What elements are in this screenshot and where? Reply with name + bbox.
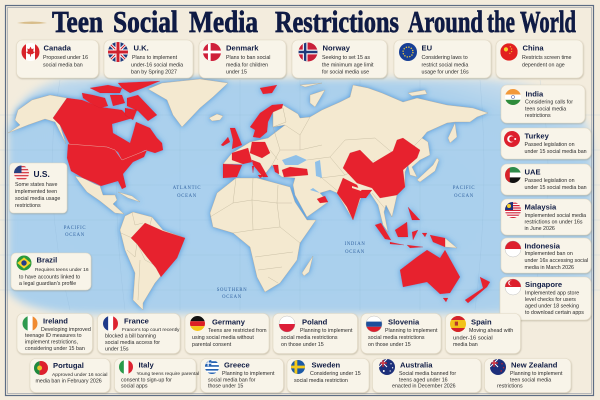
card: Germany: parental consent xyxy=(192,342,232,348)
card: Malaysia: Implemented social media xyxy=(524,213,586,219)
card: EU xyxy=(394,40,491,78)
Turkey xyxy=(282,167,308,177)
card: U.S.: U.S. xyxy=(34,169,50,179)
Italy and Sardinia xyxy=(252,160,268,178)
card: Turkey xyxy=(501,128,591,159)
South America xyxy=(120,212,185,310)
card: Poland: on those under 15 xyxy=(281,342,324,348)
card: EU: usage for under 16s xyxy=(422,70,469,76)
card: Sweden: Considering under 15 xyxy=(310,371,361,377)
card: Ireland xyxy=(17,314,92,354)
Germany and Poland xyxy=(250,142,270,158)
land: Americas cream xyxy=(8,79,228,310)
New Zealand xyxy=(465,277,490,303)
card: France xyxy=(98,314,180,354)
Greece xyxy=(273,165,279,174)
Alaska xyxy=(8,95,67,144)
card: Spain: under-16 social xyxy=(453,336,493,342)
card: Italy: social apps xyxy=(121,384,148,390)
Nordics xyxy=(250,104,283,138)
card: France: France's top court recently xyxy=(122,327,180,333)
card: Poland: social media restrictions xyxy=(281,335,338,341)
card: Germany: using social media without xyxy=(192,335,254,341)
card: Indonesia: Indonesia xyxy=(524,242,561,250)
card: U.K.: ban by Spring 2027 xyxy=(131,70,177,76)
Africa xyxy=(210,178,316,292)
card: Portugal: media ban in February 2026 xyxy=(36,378,102,384)
Svalbard xyxy=(260,85,277,94)
card: Indonesia xyxy=(501,238,591,273)
title: Around xyxy=(408,5,483,39)
U.K. xyxy=(230,128,242,149)
card: U.S.: social media usage xyxy=(15,196,60,202)
card: Australia: enacted in December 2026 xyxy=(392,384,456,390)
card: Norway: Norway xyxy=(322,44,351,52)
card: Denmark: media for children xyxy=(226,62,268,68)
card: Poland xyxy=(273,314,358,354)
ocean labels: OCEAN xyxy=(345,250,365,255)
card: Malaysia xyxy=(501,199,591,235)
card: Turkey: Turkey xyxy=(524,132,550,140)
title: Social xyxy=(113,5,178,39)
title: the xyxy=(487,5,515,39)
card: Ireland: Ireland xyxy=(43,316,68,326)
card: Greece xyxy=(200,358,284,392)
ocean labels: ATLANTIC xyxy=(173,186,201,191)
title: Media xyxy=(189,5,258,39)
card: U.S.: Some states have xyxy=(15,182,57,188)
card: Greece: Greece xyxy=(224,360,250,370)
card: Ireland: implement restrictions, xyxy=(25,340,78,346)
card: Greece: Planning to implement xyxy=(222,371,275,377)
ocean labels: SOUTHERN xyxy=(217,288,247,293)
card: Italy xyxy=(114,358,199,392)
ocean labels: INDIAN xyxy=(345,242,365,247)
ocean labels: OCEAN xyxy=(222,295,242,300)
card: Brazil xyxy=(11,253,91,290)
card: U.K.: Plans to implement xyxy=(132,55,178,61)
Black Sea, Caspian Sea, Persian Gulf xyxy=(282,155,322,193)
title flourish xyxy=(17,22,47,24)
title: Teen xyxy=(52,5,103,39)
card: Singapore: to download certain apps xyxy=(525,310,584,316)
UAE xyxy=(317,196,328,203)
card: New Zealand xyxy=(484,358,571,392)
card: Greece: social media ban for xyxy=(208,378,256,384)
card: New Zealand: New Zealand xyxy=(511,360,558,370)
Indonesia and Malaysia xyxy=(375,207,445,248)
card: China: Restricts screen time xyxy=(522,55,572,61)
India xyxy=(337,178,372,220)
card: Australia xyxy=(372,358,481,392)
card: Brazil: Requires teens under 16 xyxy=(35,267,89,273)
card: UAE: Passed legislation on xyxy=(524,178,575,184)
card: Slovenia: Planning to implement xyxy=(385,328,438,334)
Ireland xyxy=(221,137,230,146)
card: Greece: those under 15 xyxy=(208,384,243,390)
world map xyxy=(0,79,600,314)
ocean labels: OCEAN xyxy=(454,194,474,199)
card: India: teen social media xyxy=(525,106,566,112)
card: Brazil: Brazil xyxy=(36,256,57,264)
card: Canada: social media ban xyxy=(43,62,83,68)
card: Ireland: teenage ID measures to xyxy=(25,333,82,339)
card: U.K.: U.K. xyxy=(134,44,149,52)
card: Poland: Poland xyxy=(302,318,328,326)
Madagascar xyxy=(302,256,313,276)
card: Malaysia: restrictions on under 16s xyxy=(524,220,583,226)
card: Germany: Teens are restricted from xyxy=(208,328,267,334)
card: India xyxy=(501,85,585,123)
card: Ireland: Developing improved xyxy=(41,327,91,333)
card: Turkey: Passed legislation on xyxy=(524,142,575,148)
card: Spain: Moving ahead with xyxy=(469,328,513,334)
Japan and Sakhalin xyxy=(417,158,439,182)
card: Norway: the minimum age limit xyxy=(322,62,374,68)
card: Spain xyxy=(446,314,520,354)
card: EU: EU xyxy=(422,44,433,52)
card: Singapore: Implemented app store xyxy=(525,290,579,296)
card: India: Considering calls for xyxy=(525,100,573,106)
card: Singapore: level checks for users xyxy=(525,297,576,303)
Australia xyxy=(400,250,460,294)
ocean labels: PACIFIC xyxy=(453,186,475,191)
card: Denmark: Denmark xyxy=(226,44,259,52)
card: Malaysia: Malaysia xyxy=(524,202,557,212)
card: UAE: under 15 social media ban xyxy=(524,185,587,191)
card: Norway xyxy=(292,40,387,78)
card: Malaysia: in June 2026 xyxy=(524,226,555,232)
card: Germany xyxy=(185,314,269,354)
card: Australia: Social media banned for xyxy=(399,371,456,377)
card: Slovenia: on those under 15 xyxy=(368,342,411,348)
Iceland xyxy=(209,114,223,121)
card: Germany: Germany xyxy=(212,318,246,326)
card: UAE: UAE xyxy=(524,168,541,176)
card: China: dependent on age xyxy=(522,62,565,68)
card: Indonesia: media in March 2026 xyxy=(524,265,574,271)
China xyxy=(343,138,420,198)
card: Slovenia xyxy=(361,314,441,354)
card: Ireland: considering under 15 ban xyxy=(25,346,85,352)
card: France: under 15s xyxy=(105,346,129,352)
Eurasia xyxy=(223,85,488,232)
borders of Eurasia xyxy=(270,117,422,217)
Papua east and arctic islands xyxy=(445,238,457,248)
card: Denmark xyxy=(199,40,286,78)
card: Canada xyxy=(16,40,98,78)
card: U.S.: restrictions xyxy=(15,203,41,209)
card: Portugal xyxy=(30,358,110,392)
card: France: social media access for xyxy=(105,340,160,346)
card: Slovenia: social media restrictions xyxy=(368,335,425,341)
card: India: restrictions xyxy=(525,113,551,119)
card: Spain: media ban xyxy=(453,342,478,348)
Spain and Portugal xyxy=(223,164,242,178)
card: Poland: Planning to implement xyxy=(300,328,353,334)
title xyxy=(52,5,576,39)
ocean xyxy=(8,79,592,314)
ocean labels: OCEAN xyxy=(65,233,85,238)
card: China xyxy=(496,40,583,78)
Greenland xyxy=(148,79,228,127)
card: Turkey: under 15 social media ban xyxy=(524,149,587,155)
card: Spain: Spain xyxy=(471,318,492,326)
card: Norway: Seeking to set 15 as xyxy=(322,55,370,61)
card: Denmark: under 15 xyxy=(226,70,247,76)
Mexico and Central America xyxy=(75,176,124,214)
Canada xyxy=(53,98,163,160)
Tasmania xyxy=(443,298,448,302)
ocean labels: OCEAN xyxy=(177,194,197,199)
card: New Zealand: teen social media xyxy=(510,378,551,384)
card: EU: restrict social media xyxy=(422,62,468,68)
card: Canada: Proposed under 16 xyxy=(43,55,88,61)
card: France: blocked a bill banning xyxy=(105,334,156,340)
ocean labels xyxy=(64,186,475,300)
card: Portugal: Approved under 16 social xyxy=(52,372,107,378)
card: U.K. xyxy=(104,40,193,78)
card: U.K.: under-16 social media xyxy=(131,62,183,68)
card: UAE xyxy=(501,164,591,195)
card: Brazil: a legal guardian's profile xyxy=(19,281,76,287)
card: Singapore: Singapore xyxy=(525,280,562,289)
card: Portugal: Portugal xyxy=(53,361,84,370)
card: Australia: Australia xyxy=(400,360,433,370)
card: China: China xyxy=(522,44,544,52)
France xyxy=(232,148,252,164)
card: Australia: teens aged under 16 xyxy=(399,378,448,384)
card: Sweden: Sweden xyxy=(312,360,341,370)
card: Singapore xyxy=(500,277,591,320)
card: Sweden: social media restriction xyxy=(294,378,348,384)
card: New Zealand: restrictions xyxy=(497,384,523,390)
card: Canada: Canada xyxy=(44,44,72,52)
card: U.S.: implemented teen xyxy=(15,189,57,195)
card: Italy: Italy xyxy=(138,360,154,370)
card: Italy: consent to sign-up for xyxy=(121,378,172,384)
Canadian arctic islands xyxy=(82,81,160,121)
Nepal gap xyxy=(352,186,362,191)
card: Norway: for social media use xyxy=(322,70,369,76)
card: Sweden xyxy=(287,358,369,392)
title: Restrictions xyxy=(275,5,399,39)
card: Indonesia: under 16s accessing social xyxy=(524,258,588,264)
card: Brazil: to have accounts linked to xyxy=(19,274,80,280)
card: U.S. xyxy=(10,163,67,213)
card: Indonesia: Implemented ban on xyxy=(524,251,573,257)
Finland xyxy=(273,108,286,127)
Brazil xyxy=(131,223,185,277)
card: India: India xyxy=(526,90,544,98)
card: France: France xyxy=(124,316,149,326)
card: New Zealand: Planning to implement xyxy=(510,371,563,377)
card: Italy: Young teens require parental xyxy=(136,371,199,377)
card: EU: Considering laws to xyxy=(422,55,468,61)
card: Denmark: Plans to ban social xyxy=(226,55,270,61)
United States xyxy=(67,144,147,189)
ocean labels: PACIFIC xyxy=(64,226,86,231)
card: Slovenia: Slovenia xyxy=(388,318,420,326)
card: Singapore: aged under 18 seeking xyxy=(525,304,579,310)
